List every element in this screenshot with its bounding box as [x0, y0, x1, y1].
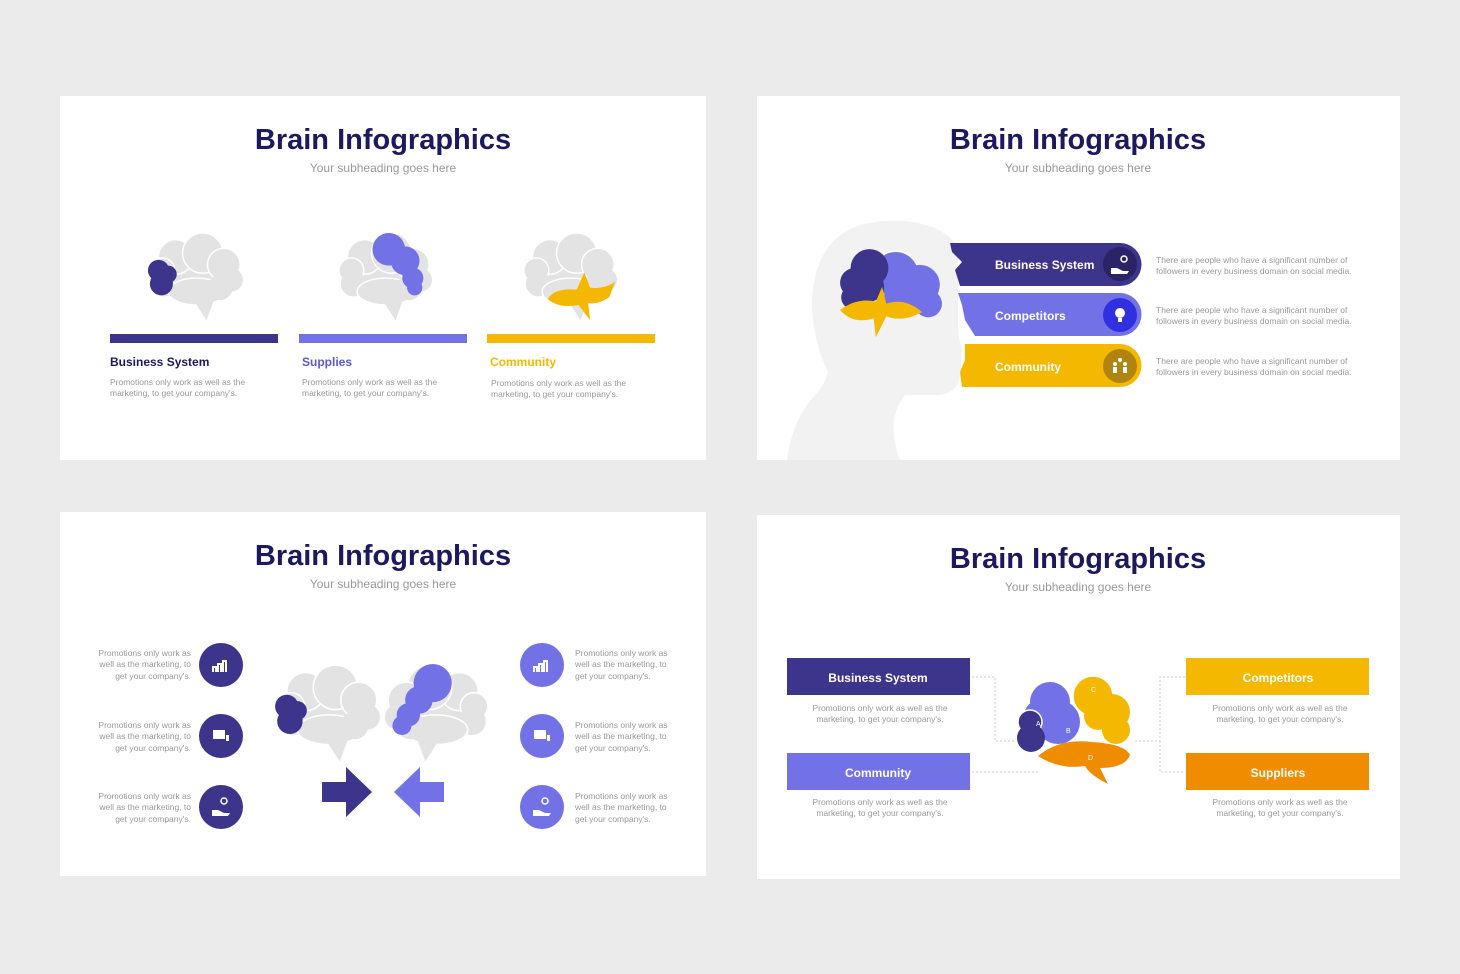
bar: business system — [110, 334, 278, 398]
bar: supplies — [299, 334, 467, 398]
pill: competitors — [958, 293, 1142, 336]
bar: business system: marketing, to get your company's. — [110, 388, 237, 398]
head silhouette — [787, 221, 962, 460]
connectors — [972, 677, 1185, 772]
brain: ABCD: D — [1088, 755, 1093, 762]
icon: lightbulb — [1103, 298, 1137, 332]
bar: community: marketing, to get your company's. — [491, 389, 618, 399]
right items: Promotions only work as — [575, 720, 668, 730]
left items: get your company's. — [115, 743, 191, 753]
title: Brain Infographics — [950, 124, 1206, 156]
left items: Promotions only work as — [98, 791, 191, 801]
left items: well as the marketing, to — [98, 731, 191, 741]
panel: top-right: There are people who have a significant number of — [1156, 255, 1348, 265]
brain: ABCD: A — [1036, 721, 1041, 728]
left items: well as the marketing, to — [98, 659, 191, 669]
brain: supplies — [339, 233, 432, 320]
box: suppliers: Suppliers — [1251, 766, 1306, 780]
right items: well as the marketing, to — [574, 731, 667, 741]
bar: community — [487, 334, 655, 399]
box: competitors — [1186, 658, 1369, 724]
bar: supplies: Supplies — [302, 355, 352, 369]
panel: top-right: followers in every business domain on social media. — [1156, 367, 1352, 377]
right items: get your company's. — [575, 671, 651, 681]
subheading: Your subheading goes here — [310, 577, 456, 591]
right items: well as the marketing, to — [574, 802, 667, 812]
box: community: Promotions only work as well as the — [812, 797, 948, 807]
pill: community: Community — [995, 360, 1061, 374]
brain: left — [275, 665, 380, 762]
icon: people — [1103, 349, 1137, 383]
icon: coins hand — [1103, 247, 1137, 281]
panel: bottom-left — [60, 512, 706, 876]
subheading: Your subheading goes here — [310, 161, 456, 175]
right items: well as the marketing, to — [574, 659, 667, 669]
left items — [98, 648, 191, 824]
box: community — [787, 753, 970, 818]
left items: get your company's. — [115, 814, 191, 824]
left items: Promotions only work as — [98, 648, 191, 658]
title: Brain Infographics — [255, 540, 511, 572]
panel: top-right: There are people who have a significant number of — [1156, 305, 1348, 315]
box: suppliers — [1186, 753, 1369, 818]
arrow: right — [322, 767, 372, 817]
brain: ABCD: C — [1091, 687, 1096, 694]
box: competitors: Promotions only work as well as the — [1212, 703, 1348, 713]
icons: right — [520, 643, 564, 829]
bar: supplies: Promotions only work as well as the — [302, 377, 437, 387]
bar: community: Community — [490, 355, 556, 369]
subheading: Your subheading goes here — [1005, 580, 1151, 594]
bar: community: Promotions only work as well as the — [491, 378, 626, 388]
left items: Promotions only work as — [98, 720, 191, 730]
left items: well as the marketing, to — [98, 802, 191, 812]
panel: top-left — [60, 96, 706, 460]
brain: head — [840, 249, 942, 337]
brain: business system — [148, 233, 243, 320]
right items — [574, 648, 668, 824]
brain: ABCD: B — [1066, 728, 1071, 735]
brain: right (mirrored) — [385, 664, 488, 762]
panel: top-right: followers in every business domain on social media. — [1156, 266, 1352, 276]
pill: business system: Business System — [995, 258, 1094, 272]
left items: get your company's. — [115, 671, 191, 681]
bar: business system: Business System — [110, 355, 209, 369]
bar: business system: Promotions only work as well as the — [110, 377, 245, 387]
right items: Promotions only work as — [575, 648, 668, 658]
subheading: Your subheading goes here — [1005, 161, 1151, 175]
right items: get your company's. — [575, 814, 651, 824]
panel: top-right: followers in every business domain on social media. — [1156, 316, 1352, 326]
brain: community — [524, 233, 617, 320]
box: community: Community — [845, 766, 911, 780]
box: suppliers: Promotions only work as well as the — [1212, 797, 1348, 807]
panel: bottom-right — [757, 515, 1400, 879]
box: suppliers: marketing, to get your company's. — [1216, 808, 1344, 818]
pill: business system — [950, 243, 1142, 286]
box: community: marketing, to get your company's. — [816, 808, 944, 818]
panel: top-right: There are people who have a significant number of — [1156, 356, 1348, 366]
icons: left — [199, 643, 243, 829]
right items: Promotions only work as — [575, 791, 668, 801]
title: Brain Infographics — [950, 543, 1206, 575]
box: business system: Promotions only work as well as the — [812, 703, 948, 713]
right items: get your company's. — [575, 743, 651, 753]
box: competitors: marketing, to get your company's. — [1216, 714, 1344, 724]
pill: community — [960, 344, 1142, 387]
box: business system: marketing, to get your company's. — [816, 714, 944, 724]
pill: competitors: Competitors — [995, 309, 1066, 323]
title: Brain Infographics — [255, 124, 511, 156]
box: competitors: Competitors — [1243, 671, 1314, 685]
bar: supplies: marketing, to get your company's. — [302, 388, 429, 398]
brain: ABCD — [1017, 676, 1130, 784]
arrow: left — [394, 767, 444, 817]
panel: top-right — [757, 96, 1400, 460]
box: business system: Business System — [828, 671, 928, 685]
box: business system — [787, 658, 970, 724]
